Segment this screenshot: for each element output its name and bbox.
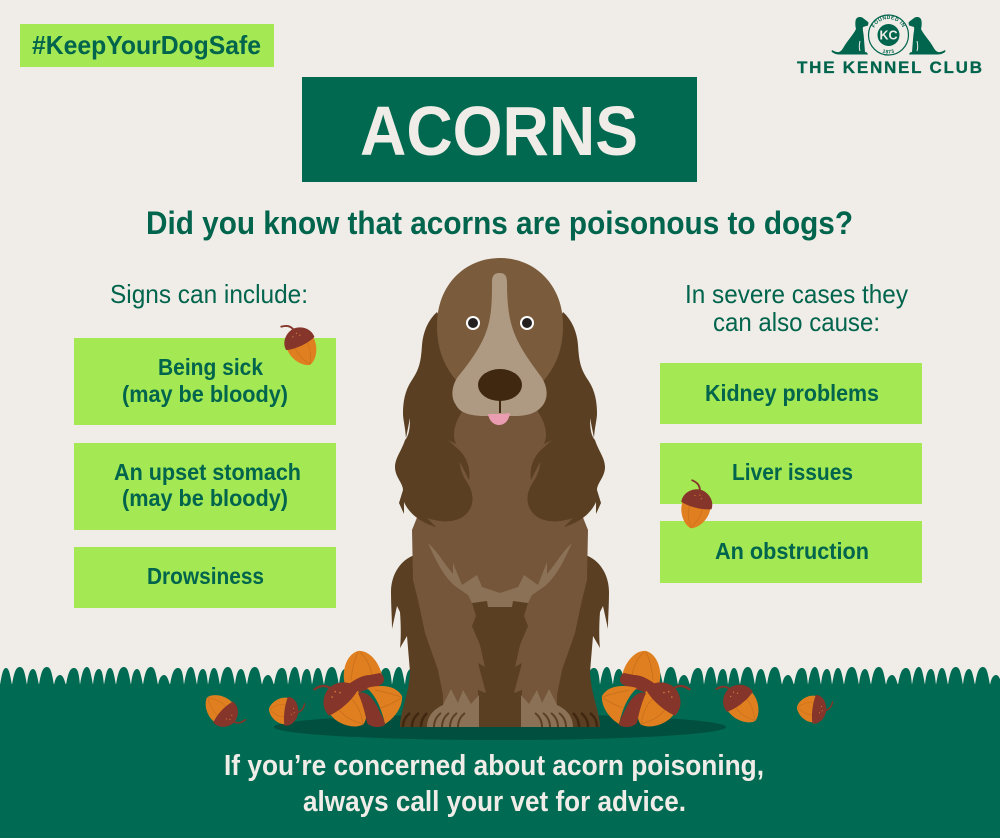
heading: signs: Signs can include:: [110, 279, 308, 309]
heading: severe cases: In severe cases they: [685, 279, 908, 309]
closing message: [224, 750, 764, 818]
severe: liver issues: [660, 443, 922, 504]
sign: being sick: (may be bloody): [122, 381, 288, 407]
logo: The Kennel Club: [797, 14, 982, 77]
emblem: KC: [879, 28, 898, 42]
dog left ear: [395, 312, 473, 527]
severe: kidney problems: Kidney problems: [705, 380, 879, 406]
grass and ground: [0, 660, 1000, 838]
title: ACORNS: [360, 92, 638, 170]
hashtag badge: [20, 24, 274, 67]
sign: upset stomach: [74, 443, 336, 530]
acorns: right: [712, 672, 768, 731]
severe: obstruction: An obstruction: [715, 538, 869, 564]
dog right ear: [527, 312, 605, 527]
severe: obstruction: [660, 521, 922, 583]
logo: The Kennel Club: THE KENNEL CLUB: [797, 58, 982, 77]
heading: severe cases: [685, 279, 908, 337]
dog eyes: [466, 316, 534, 330]
sign: drowsiness: Drowsiness: [147, 563, 264, 589]
heading: severe cases: can also cause:: [713, 307, 880, 337]
sign: being sick: [74, 338, 336, 425]
dog nose: [478, 369, 522, 413]
icon: acorn on signs panel: [276, 316, 324, 371]
dog paws: [403, 689, 597, 727]
acorns: far right: [795, 693, 833, 726]
title: [302, 77, 697, 182]
dog chest fur: [428, 543, 572, 607]
dog centre shadow: [470, 596, 530, 727]
emblem: 1873: [882, 50, 894, 54]
panel: severe cases: [660, 279, 922, 583]
hashtag badge: #KeepYourDogSafe: [32, 30, 261, 60]
acorns: right cluster: [602, 651, 695, 738]
dog muzzle stripe: [452, 273, 547, 416]
acorns: small left: [267, 695, 305, 728]
emblem: [868, 14, 910, 56]
panel: signs: [74, 279, 336, 608]
closing message: always call your vet for advice.: [303, 786, 686, 818]
acorns: far left: [197, 687, 249, 737]
sign: drowsiness: [74, 547, 336, 608]
dog haunches: [391, 556, 609, 727]
dog body: [412, 400, 588, 727]
emblem: FOUNDED IN: [872, 16, 906, 28]
sign: being sick: Being sick: [158, 354, 263, 380]
severe: kidney problems: [660, 363, 922, 424]
icon: right dog: [908, 17, 946, 54]
icon: acorn on severe panel: [676, 479, 717, 532]
subtitle: Did you know that acorns are poisonous to dogs?: [146, 205, 853, 241]
sign: upset stomach: An upset stomach: [114, 459, 301, 485]
illustration: dog: [391, 258, 609, 727]
sign: upset stomach: (may be bloody): [122, 485, 288, 511]
severe: liver issues: Liver issues: [732, 459, 853, 485]
dog tongue: [488, 413, 510, 425]
icon: left dog: [832, 17, 868, 54]
acorns: left cluster: [309, 651, 402, 738]
closing message: If you’re concerned about acorn poisoning,: [224, 750, 764, 782]
dog head: [437, 258, 563, 395]
dog shadow: [274, 714, 726, 740]
